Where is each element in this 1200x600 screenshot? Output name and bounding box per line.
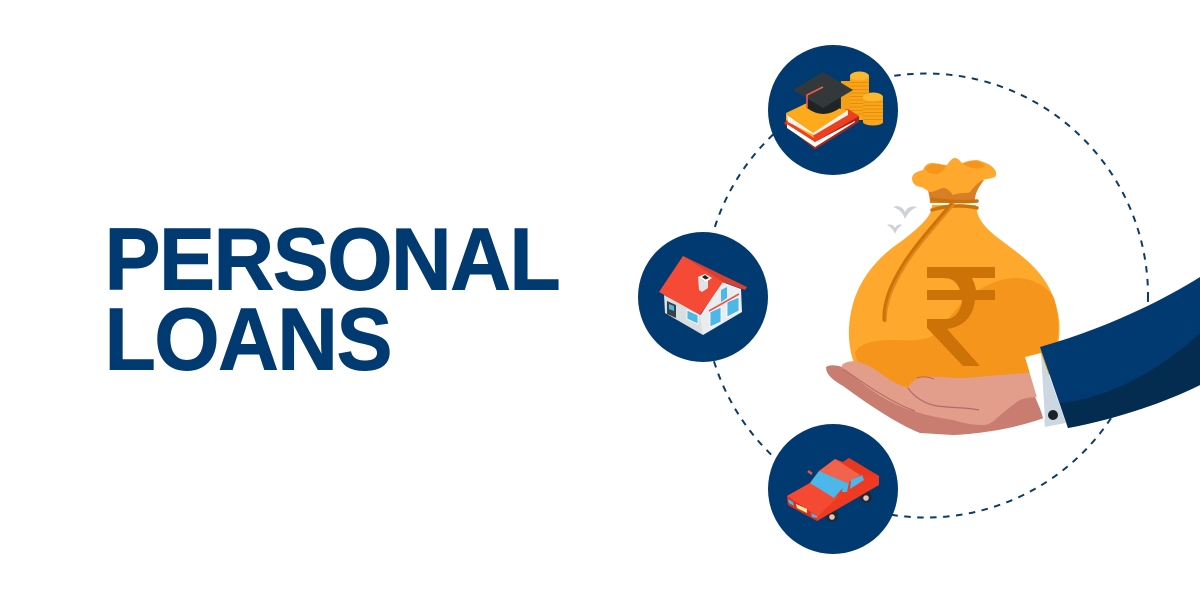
bag shade	[855, 278, 1058, 396]
arm with suit sleeve and shirt cuff	[1025, 277, 1200, 428]
sleeve shadow	[1060, 333, 1200, 428]
title: Personal Loans: LOANS	[104, 291, 391, 389]
roof	[659, 256, 747, 315]
chimney	[698, 274, 712, 292]
icon: house badge	[638, 232, 768, 362]
graduation cap	[793, 72, 853, 114]
icon: birds	[887, 206, 917, 234]
title: Personal Loans	[104, 211, 559, 389]
icon: car badge	[768, 424, 898, 554]
icon: education badge	[768, 45, 898, 175]
cuff button	[1048, 410, 1058, 420]
car windows	[788, 471, 864, 518]
title: Personal Loans: PERSONAL	[104, 211, 559, 309]
red stripe	[709, 294, 739, 311]
rupee symbol	[927, 267, 995, 366]
money bag	[849, 158, 1060, 396]
dashed orbit circle	[704, 74, 1148, 518]
bag body	[849, 205, 1060, 396]
bag top	[912, 158, 996, 195]
car body	[787, 458, 879, 521]
door and windows	[667, 287, 739, 327]
wheels	[826, 491, 872, 522]
hand	[826, 361, 1044, 435]
bag neck	[927, 180, 984, 203]
coins	[841, 72, 883, 126]
suit sleeve	[1040, 277, 1200, 428]
house walls	[664, 282, 742, 335]
rope	[884, 199, 977, 320]
books	[784, 103, 859, 150]
shirt cuff	[1041, 353, 1066, 427]
